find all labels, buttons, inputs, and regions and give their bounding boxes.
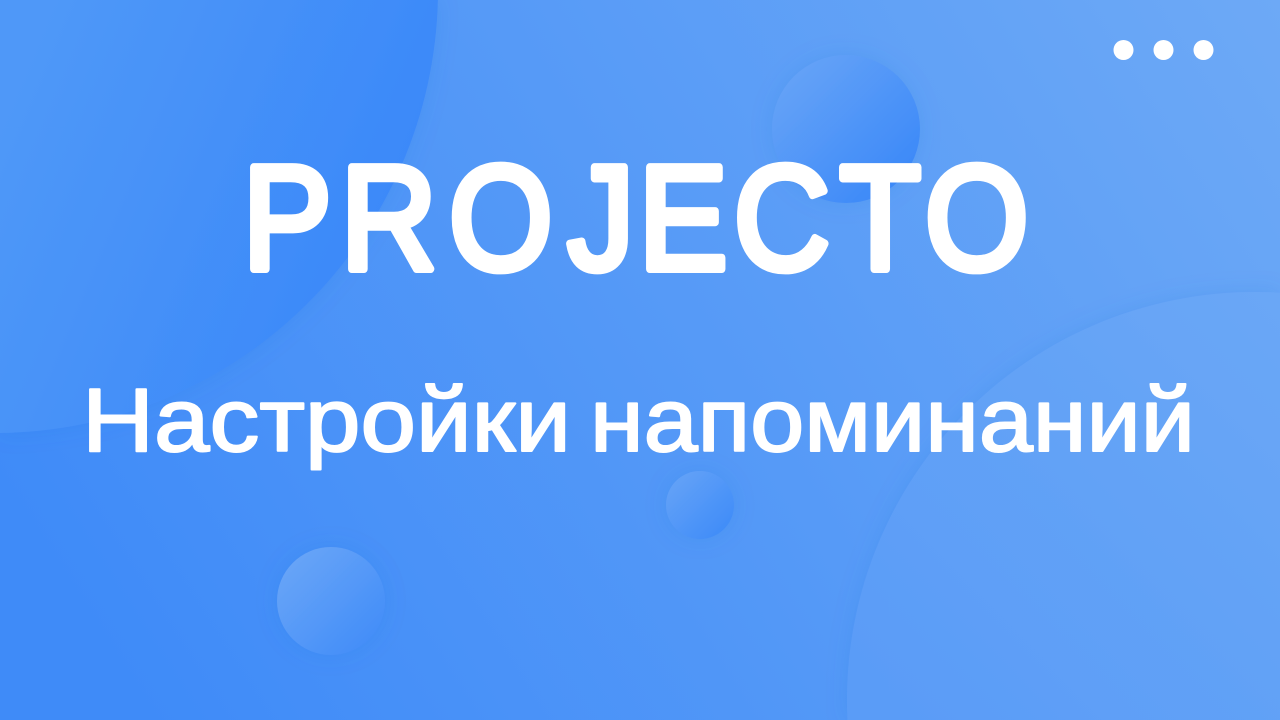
title: PROJECTO	[243, 136, 1029, 301]
subtitle	[82, 371, 1195, 471]
decorative circle: top left	[0, 0, 438, 433]
subtitle: Настройки	[82, 371, 571, 471]
decorative circle: behind title	[772, 55, 920, 203]
decorative circle: bottom right	[847, 292, 1280, 720]
decorative circle: small centre	[666, 471, 734, 539]
icon: three dots menu	[1114, 40, 1214, 60]
decorative circle: lower left	[277, 547, 385, 655]
subtitle: напоминаний	[590, 371, 1195, 471]
